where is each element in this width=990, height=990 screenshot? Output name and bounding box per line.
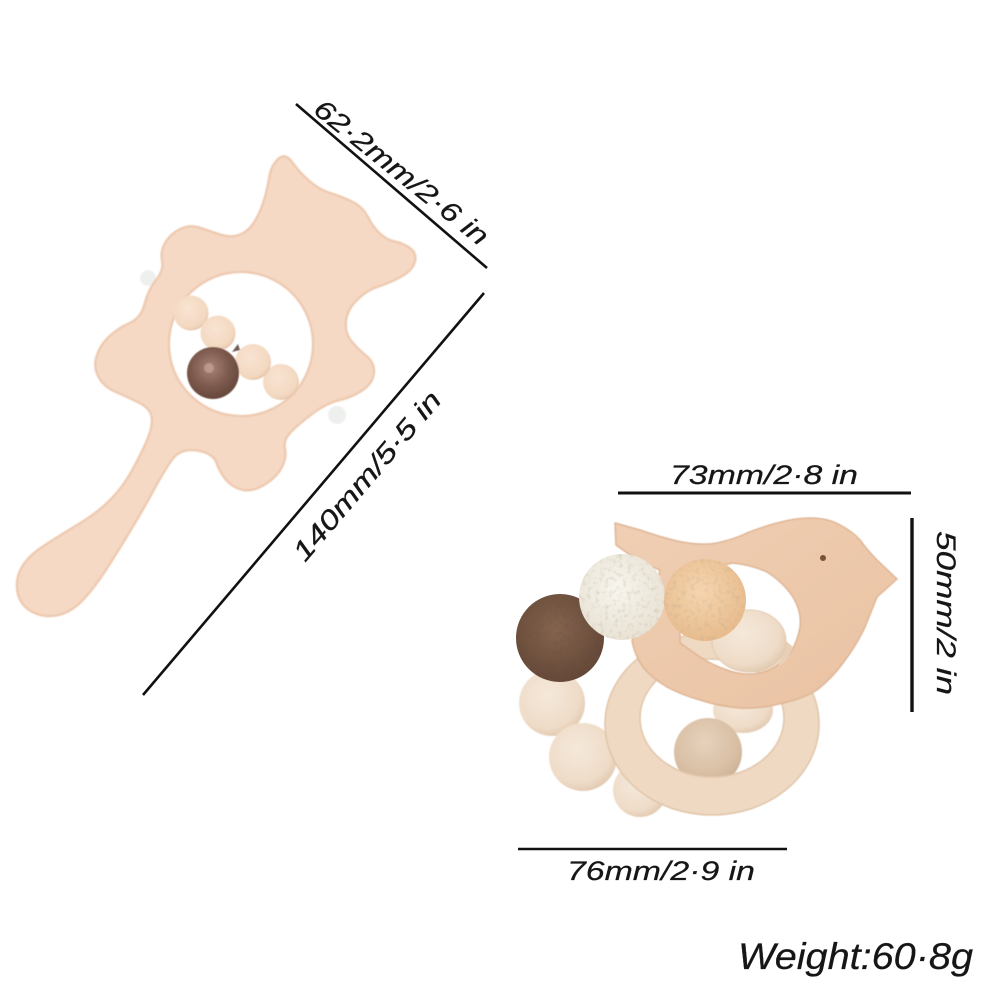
dimension line: bird width — [618, 492, 911, 494]
dimension line: ring width — [518, 848, 787, 850]
ring section seen through bird — [778, 641, 793, 668]
white crochet bead — [579, 554, 665, 640]
dimension line: bird height — [910, 518, 914, 712]
tan crochet bead — [664, 559, 746, 641]
rattle beads — [174, 296, 299, 400]
bird shape — [615, 518, 897, 708]
label: ring width: 76mm/2·9 in — [567, 856, 755, 886]
brown crochet bead — [516, 594, 604, 682]
lower wooden beads — [519, 670, 773, 817]
label: rattle width: 62·2mm/2·6 in — [308, 93, 495, 251]
string knots — [140, 270, 346, 424]
cream bead — [712, 610, 786, 672]
label: weight: Weight:60·8g — [738, 936, 973, 977]
label: rattle length: 140mm/5·5 in — [287, 385, 447, 567]
wooden bear rattle — [17, 156, 415, 616]
wooden ring — [605, 633, 819, 815]
rattle body — [17, 156, 415, 616]
bird eye — [820, 555, 826, 561]
dimension line: rattle width — [296, 104, 487, 268]
label: bird width: 73mm/2·8 in — [670, 460, 858, 490]
label: bird height: 50mm/2 in — [931, 531, 961, 695]
dimension line: rattle length — [143, 293, 484, 695]
wooden bird teether — [516, 518, 897, 817]
